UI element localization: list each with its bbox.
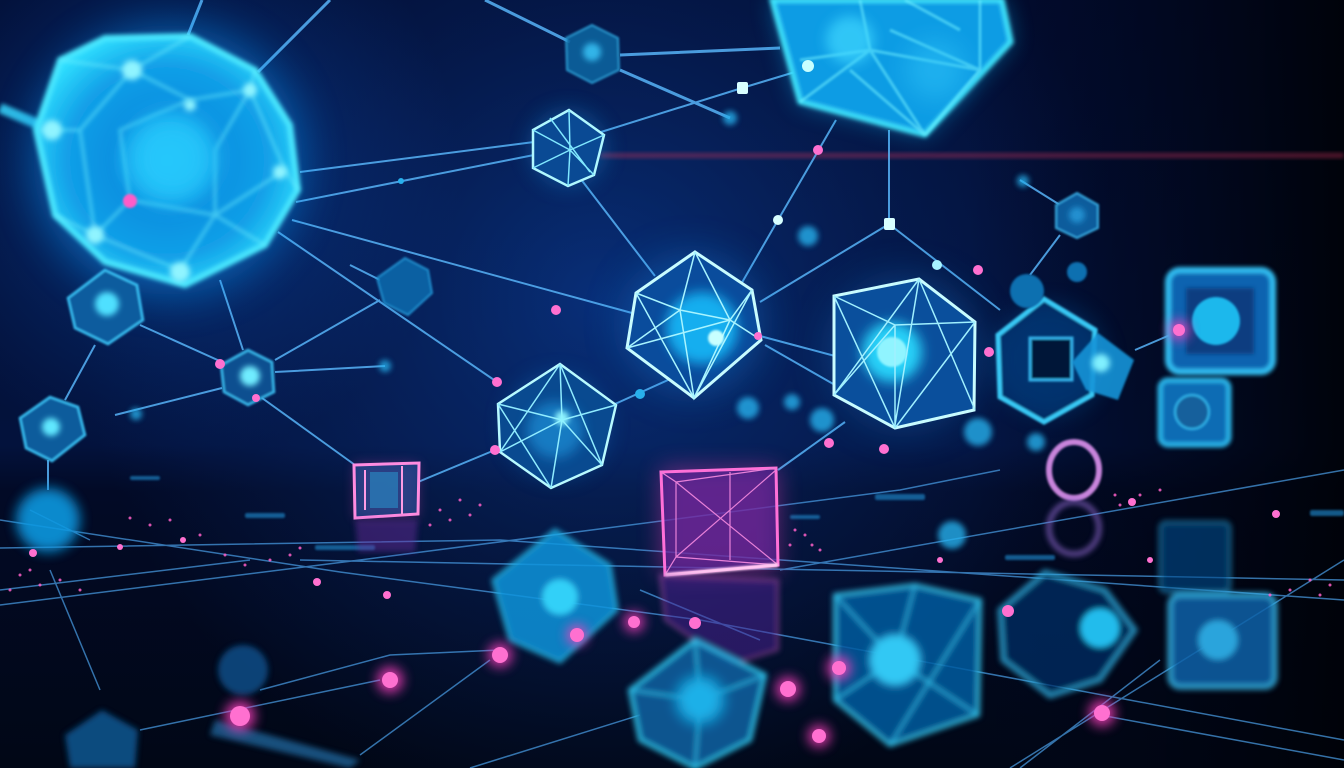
reflections on floor (65, 502, 1275, 768)
top right polyhedron (772, 0, 1011, 135)
big faceted sphere (33, 25, 303, 295)
small polyhedron: upper centre (532, 110, 604, 186)
left cluster nodes (16, 258, 432, 552)
small node: top (566, 25, 619, 83)
floor particles (8, 488, 1332, 596)
floor dashes (130, 476, 1344, 560)
polyhedron: lower centre (498, 364, 616, 488)
wireframe cube: centre right (833, 279, 977, 428)
floor grid (0, 470, 1344, 768)
magenta nodes (29, 145, 1280, 747)
small pink cube (354, 463, 419, 518)
centre polyhedron (627, 252, 761, 398)
right cluster shapes (995, 193, 1273, 498)
pink glass cube (661, 468, 778, 575)
network connection lines (0, 0, 1170, 490)
glowing cyan nodes (130, 82, 1045, 549)
